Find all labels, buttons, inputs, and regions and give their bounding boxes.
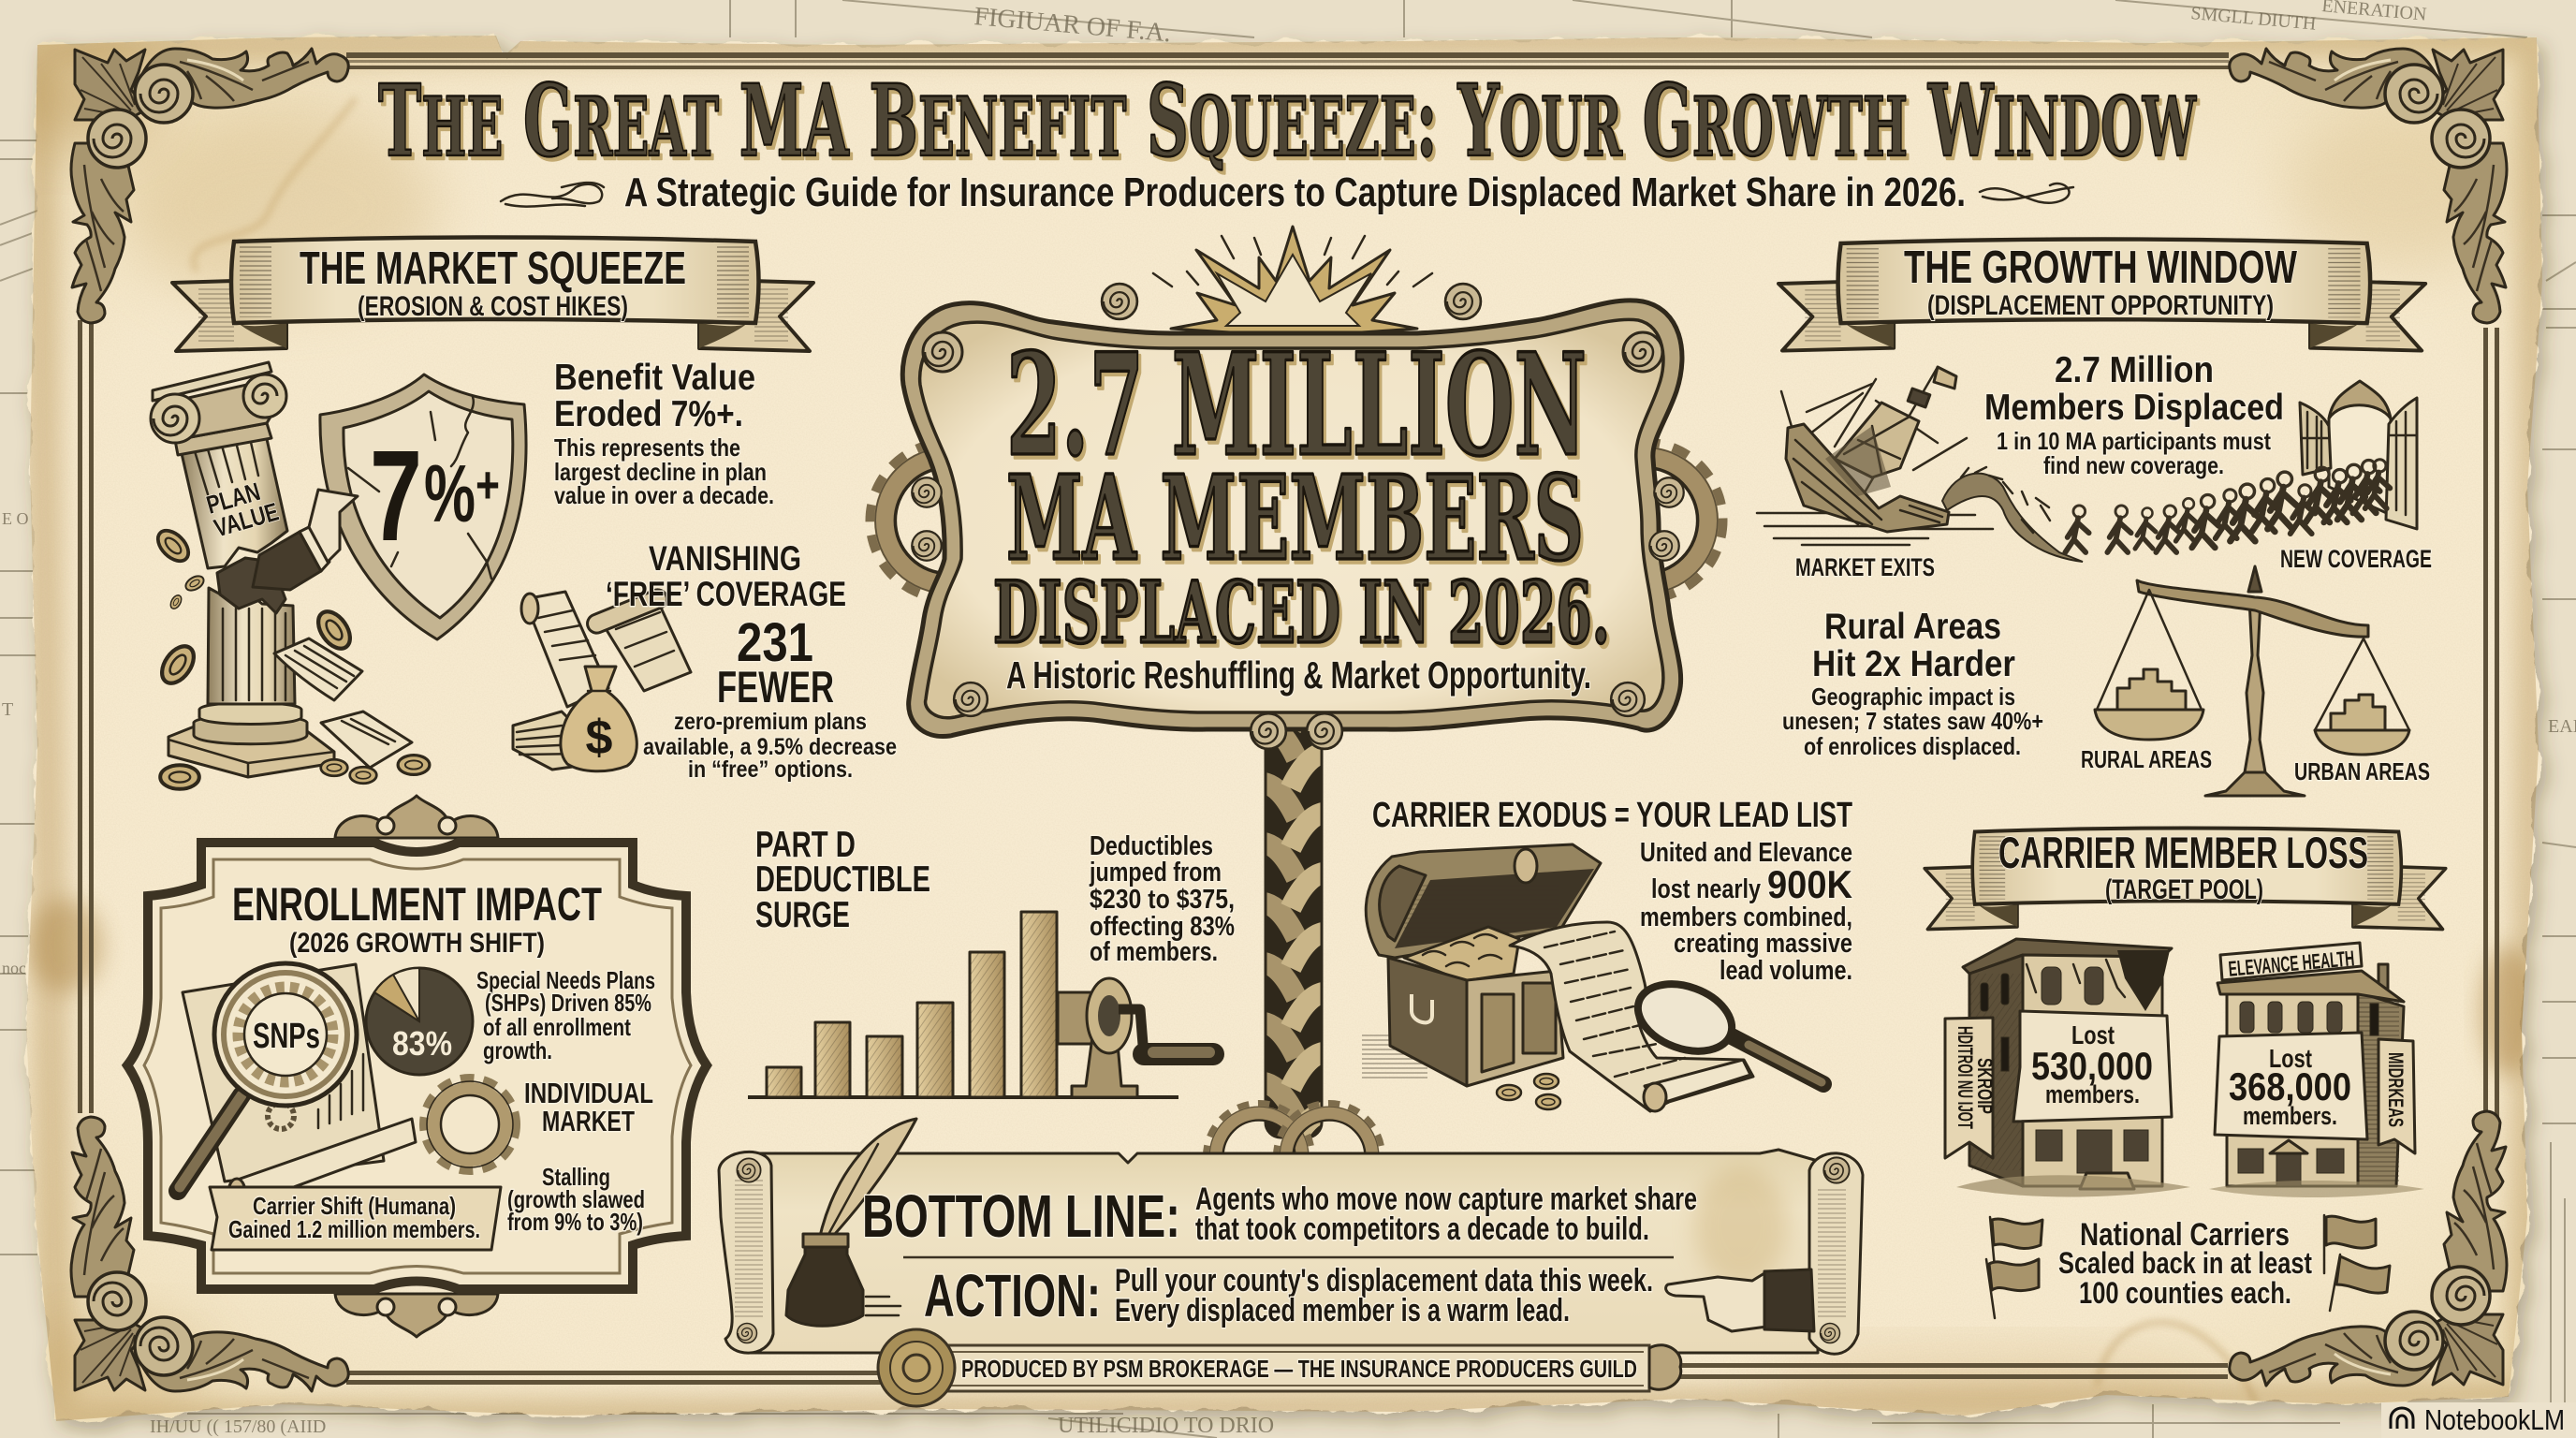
chest body: [1388, 958, 1467, 1086]
title: THE GREAT MA BENEFIT SQUEEZE: YOUR GROWTH WINDOW: [378, 62, 2197, 179]
plaque headline: 2.7 MILLION: [1006, 323, 1587, 488]
text: national carriers: Scaled back in at least: [2058, 1246, 2312, 1280]
text: stalling: (growth slawed: [507, 1185, 645, 1213]
frame: [127, 843, 707, 1289]
background: stacked old documents: SMGLL DIUTH: [2190, 3, 2317, 35]
heading: part d deductible surge: PART D: [755, 825, 856, 865]
text: 2.7 million members displaced: [1984, 350, 2284, 479]
label: plan value: [203, 474, 282, 543]
bottom line statement: that took competitors a decade to build.: [1195, 1211, 1649, 1247]
panel: enrollment impact: [127, 796, 707, 1337]
icons: retreating flags: [1986, 1215, 2390, 1318]
scroll left roll: [719, 1152, 773, 1353]
panel: bottom line scroll: [719, 1119, 1863, 1354]
corner ornament bottom right: [2230, 1111, 2507, 1386]
label: market exits: MARKET EXITS: [1795, 553, 1935, 581]
action statement: Pull your county's displacement data this week.: [1115, 1263, 1653, 1299]
background: stacked old documents: T: [2, 699, 13, 720]
text: rural areas hit harder: Rural Areas: [1824, 607, 2001, 647]
magnifier with SNPs gear: SNPs: [253, 1017, 320, 1056]
loss banner: 530,000: [2013, 1011, 2172, 1122]
gears at post foot: [1209, 1107, 1379, 1206]
scroll body: [749, 1150, 1818, 1353]
chest lid: [1366, 844, 1601, 958]
text: deductibles jumped: $230 to $375,: [1090, 885, 1235, 915]
elevance health sign: [2220, 943, 2362, 981]
side banner: [2378, 1039, 2415, 1153]
text: special needs plans: (SHPs) Driven 85%: [485, 989, 651, 1017]
text: benefit value eroded: [554, 358, 774, 509]
bottom line statement: Agents who move now capture market share: [1195, 1181, 1697, 1217]
text: special needs plans: Special Needs Plans: [476, 966, 655, 994]
callout: carrier shift: [210, 1187, 501, 1250]
text: deductibles jumped: of members.: [1090, 937, 1218, 967]
background: stacked old documents: noc: [2, 959, 26, 977]
corner ornament top left: [71, 49, 348, 323]
parchment stain: [1694, 1166, 1788, 1287]
bars: [767, 912, 1057, 1097]
illustration: sinking ship: [1757, 367, 1993, 545]
text: stalling: from 9% to 3%): [507, 1208, 643, 1236]
banner: the growth window: THE GROWTH WINDOW: [1904, 242, 2298, 293]
right pan: [2315, 638, 2409, 755]
banner: carrier member loss: CARRIER MEMBER LOSS: [1998, 828, 2368, 877]
background: stacked old documents: IH/UU (( 157/80 (AIID: [150, 1416, 326, 1437]
text: united and elevance: United and Elevance: [1640, 838, 1852, 868]
elevance health sign: ELEVANCE HEALTH: [2228, 946, 2355, 981]
hand gripping the shield: [253, 490, 358, 590]
footer band: PRODUCED BY PSM BROKERAGE — THE INSURANCE PRODUCERS GUILD: [961, 1355, 1637, 1383]
text: vanishing free coverage: in “free” options.: [688, 756, 853, 783]
illustration: water trail into crowd: [1942, 467, 2083, 562]
background: stacked old documents: UTILICIDIO TO DRIO: [1058, 1414, 1274, 1438]
text: benefit value eroded: largest decline in plan: [554, 458, 767, 486]
action statement: Every displaced member is a warm lead.: [1115, 1293, 1570, 1328]
text: united and elevance: members combined,: [1640, 902, 1852, 932]
text: stalling: [507, 1163, 645, 1236]
illustration: map scroll with small chart: [183, 964, 416, 1208]
text: deductibles jumped: offecting 83%: [1090, 912, 1235, 942]
text: individual market: INDIVIDUAL: [524, 1077, 653, 1109]
text: benefit value eroded: This represents the: [554, 433, 740, 462]
gold coins: [1404, 927, 1519, 981]
side banner: HDITROI NU IJOT: [1954, 1026, 1977, 1129]
side banner: MIDRKEAS: [2384, 1052, 2408, 1127]
callout: carrier shift: Gained 1.2 million members.: [228, 1215, 480, 1243]
illustration: treasure chest, scroll and magnifier: [1362, 844, 1823, 1111]
text: individual market: MARKET: [542, 1105, 635, 1137]
text: united and elevance: lead volume.: [1720, 956, 1852, 986]
text: national carriers: National Carriers: [2080, 1217, 2290, 1253]
text: vanishing free coverage: ‘FREE’ COVERAGE: [606, 575, 846, 613]
shield value: 7%+: [370, 424, 500, 568]
footer band: [889, 1345, 1681, 1391]
illustration: balance scale: [2095, 566, 2409, 796]
corner ornament bottom left: [71, 1117, 348, 1391]
text: united and elevance: 900K: [1767, 862, 1852, 906]
label: new coverage: NEW COVERAGE: [2280, 545, 2432, 573]
banner: carrier member loss: (TARGET POOL): [2105, 874, 2263, 905]
rubble at the break: [217, 558, 285, 613]
subtitle with flourishes: A Strategic Guide for Insurance Producers to Capture Displaced Market Share in 2026.: [624, 169, 1966, 215]
panel heading: ENROLLMENT IMPACT: [232, 878, 602, 931]
banner: the market squeeze: (EROSION & COST HIKES): [358, 291, 628, 322]
text: united and elevance: [1640, 838, 1852, 986]
callout: carrier shift: Carrier Shift (Humana): [253, 1192, 456, 1220]
background: stacked old documents: FIGIUAR OF F.A.: [973, 2, 1172, 48]
panel heading: [232, 878, 602, 959]
text: rural areas hit harder: [1782, 607, 2043, 760]
text: 2.7 million members displaced: 1 in 10 MA participants must: [1997, 427, 2271, 455]
plaque subheading: A Historic Reshuffling & Market Opportunity.: [1006, 653, 1591, 697]
heading: carrier exodus: CARRIER EXODUS = YOUR LEAD LIST: [1372, 796, 1852, 835]
label: plan value: PLAN: [203, 477, 263, 520]
gear: right of plaque: [1572, 448, 1718, 594]
text: special needs plans: of all enrollment: [483, 1013, 631, 1041]
falling coins and paper: [153, 525, 430, 789]
illustration: elevance health building (368,000 lost): [2209, 943, 2424, 1197]
bar chart: deductible surge with hand crank: [748, 912, 1213, 1097]
label: plan value: VALUE: [211, 497, 282, 542]
panel heading: (2026 GROWTH SHIFT): [289, 928, 545, 959]
shield value: 7%+: %: [424, 449, 476, 539]
crowd of displaced members: [2065, 460, 2390, 552]
icon: quill and inkwell: [786, 1119, 916, 1326]
text: benefit value eroded: Eroded 7%+.: [554, 394, 743, 434]
upper column and capital: [151, 362, 287, 568]
label: rural areas: RURAL AREAS: [2081, 745, 2212, 773]
text: vanishing free coverage: FEWER: [717, 662, 834, 712]
heading: part d deductible surge: SURGE: [755, 895, 850, 935]
icon: individual market gear: [427, 1081, 513, 1167]
loss banner: 368,000: 368,000: [2229, 1064, 2351, 1108]
banner: the market squeeze: THE MARKET SQUEEZE: [300, 243, 686, 294]
banner: carrier member loss: [1925, 828, 2446, 930]
shield: [320, 374, 526, 639]
center plaque: [902, 284, 1684, 749]
action statement: [924, 1262, 1653, 1329]
plaque headline: [993, 323, 1610, 663]
text: benefit value eroded: value in over a decade.: [554, 481, 774, 509]
text: national carriers: 100 counties each.: [2079, 1276, 2291, 1310]
heading: part d deductible surge: [755, 825, 930, 935]
text: united and elevance: creating massive: [1674, 929, 1852, 959]
illustration: scrolls, cash stack and money bag: [513, 587, 691, 771]
text: benefit value eroded: Benefit Value: [554, 358, 755, 398]
plinth: [168, 702, 334, 777]
text: individual market: [524, 1077, 653, 1137]
shield value: 7%+: 7: [370, 424, 422, 568]
illustration: open arched door: [2300, 381, 2417, 529]
text: rural areas hit harder: Hit 2x Harder: [1812, 644, 2015, 684]
illustration: damaged carrier building (530,000 lost): [1945, 939, 2190, 1196]
pie chart: 83%: 83%: [392, 1024, 452, 1063]
background: stacked old documents: E O U: [2, 509, 45, 528]
text: deductibles jumped: Deductibles: [1090, 831, 1213, 861]
text: vanishing free coverage: available, a 9.5% decrease: [643, 734, 897, 760]
text: 2.7 million members displaced: Members Displaced: [1984, 388, 2284, 428]
text: deductibles jumped: [1089, 831, 1235, 967]
text: special needs plans: [476, 966, 655, 1064]
text: rural areas hit harder: of enrolices displaced.: [1804, 732, 2021, 760]
illustration: broken column and shield: [151, 362, 526, 789]
bottom line statement: BOTTOM LINE:: [862, 1182, 1180, 1250]
magnifier with SNPs gear: [178, 963, 357, 1191]
text: national carriers: [2058, 1217, 2312, 1310]
text: 2.7 million members displaced: 2.7 Million: [2055, 350, 2214, 390]
side banner: SKROIP: [1973, 1058, 1997, 1114]
corner ornament top right: [2230, 49, 2507, 323]
loss banner: 368,000: [2215, 1033, 2367, 1139]
loss banner: 368,000: members.: [2243, 1102, 2337, 1130]
text: vanishing free coverage: VANISHING: [649, 539, 801, 578]
pie chart: 83%: [366, 968, 473, 1075]
text: vanishing free coverage: zero-premium plans: [674, 709, 867, 735]
braided signpost: [1266, 721, 1322, 1137]
illustration: central starburst: [1153, 227, 1432, 333]
beam: [2137, 580, 2368, 637]
label: urban areas: URBAN AREAS: [2294, 757, 2430, 785]
loss banner: 530,000: 530,000: [2031, 1044, 2153, 1088]
dollar sign: $: [586, 711, 613, 765]
text: rural areas hit harder: unesen; 7 states saw 40%+: [1782, 707, 2043, 735]
loss banner: 368,000: Lost: [2269, 1044, 2312, 1073]
text: special needs plans: growth.: [483, 1036, 552, 1064]
crank machine: [1058, 978, 1213, 1097]
text: stalling: Stalling: [542, 1163, 610, 1191]
text: deductibles jumped: jumped from: [1089, 858, 1222, 888]
coins: [1534, 1074, 1559, 1089]
magnifier: [1732, 1036, 1823, 1084]
text: 2.7 million members displaced: find new coverage.: [2043, 451, 2224, 479]
action statement: ACTION:: [924, 1262, 1101, 1329]
text: united and elevance: lost nearly: [1651, 874, 1761, 904]
post and base: [2245, 599, 2265, 772]
lower column shaft: [208, 588, 295, 704]
left pan: [2095, 590, 2203, 740]
plaque headline: DISPLACED IN 2026.: [993, 564, 1610, 663]
text: vanishing free coverage: [606, 539, 897, 783]
frame crown top: [335, 796, 498, 838]
banner: the market squeeze: [172, 238, 813, 351]
icon: wax seal: [878, 1329, 955, 1406]
plaque headline: MA MEMBERS: [1006, 450, 1584, 587]
icon: pointing hand: [1666, 1269, 1814, 1331]
text: vanishing free coverage: 231: [737, 612, 813, 673]
shield value: 7%+: +: [476, 455, 500, 514]
scroll right roll: [1809, 1153, 1863, 1354]
gear: left of plaque: [875, 448, 1021, 594]
text: rural areas hit harder: Geographic impact is: [1811, 682, 2015, 711]
lead list scroll: [1510, 922, 1753, 1111]
side banner: [1945, 1018, 1997, 1158]
banner: the growth window: (DISPLACEMENT OPPORTUNITY): [1927, 290, 2274, 321]
loss banner: 530,000: members.: [2045, 1080, 2140, 1108]
bottom line statement: [862, 1181, 1697, 1250]
heading: part d deductible surge: DEDUCTIBLE: [755, 859, 930, 900]
frame crown bottom: [335, 1294, 498, 1337]
loss banner: 530,000: Lost: [2071, 1020, 2115, 1049]
banner: the growth window: [1778, 239, 2425, 351]
